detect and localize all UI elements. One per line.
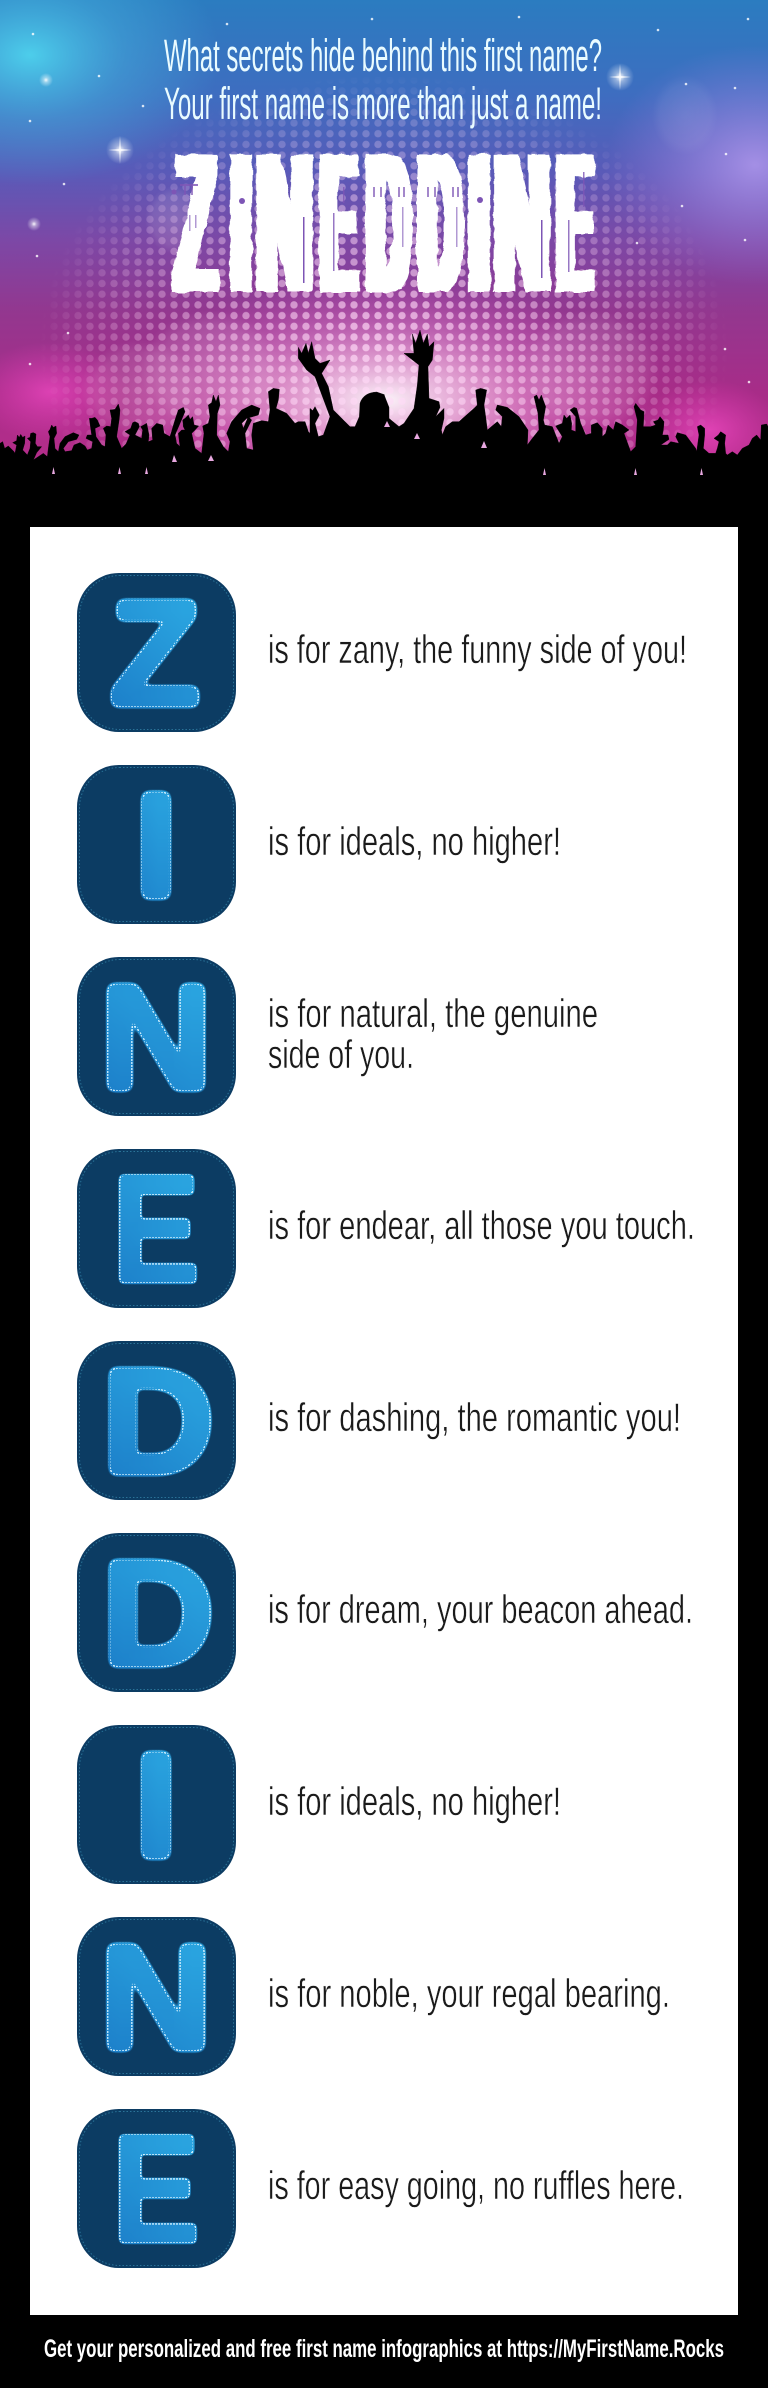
icon: letter E: E <box>112 2104 200 2275</box>
icon: letter I: I <box>133 1722 179 1889</box>
header tagline <box>164 30 602 129</box>
name title: E <box>322 111 355 335</box>
row: D second <box>77 1529 693 1697</box>
icon: letter N: N <box>99 1913 213 2081</box>
text: N line: side of you. <box>268 1033 414 1077</box>
crowd silhouette <box>0 330 768 528</box>
icon: letter I <box>77 1722 236 1889</box>
icon: letter D: D <box>101 1529 215 1697</box>
row: E <box>77 1144 695 1315</box>
name title: Z <box>176 113 216 335</box>
row: Z <box>77 569 687 737</box>
name title: I <box>469 111 489 335</box>
name title: I <box>231 111 251 335</box>
text: N line <box>268 992 598 1077</box>
text: I line: is for ideals, no higher! <box>268 1780 561 1824</box>
name title: E <box>558 111 592 335</box>
icon: letter E: E <box>112 1144 200 1315</box>
text: I line: is for ideals, no higher! <box>268 820 561 864</box>
icon: letter Z <box>77 569 236 737</box>
row: E second <box>77 2104 684 2275</box>
row: N <box>77 953 598 1121</box>
icon: letter E <box>77 1144 236 1315</box>
icon: letter N: N <box>99 953 213 1121</box>
hero background <box>0 0 768 460</box>
row: N second <box>77 1913 670 2081</box>
row: I <box>77 762 561 929</box>
name title <box>172 111 592 336</box>
icon: letter I: I <box>133 762 179 929</box>
icon: letter I <box>77 762 236 929</box>
text: N line: is for natural, the genuine <box>268 992 598 1036</box>
row: D <box>77 1337 681 1505</box>
icon: letter E <box>77 2104 236 2275</box>
name title: D <box>368 113 409 335</box>
row: I second <box>77 1722 561 1889</box>
name title: D <box>419 113 461 335</box>
name title: N <box>257 112 312 336</box>
white content panel <box>30 527 738 2315</box>
name title: N <box>495 112 549 336</box>
sparkles and stars <box>27 16 750 383</box>
icon: letter Z: Z <box>109 569 201 737</box>
icon: letter D: D <box>101 1337 215 1505</box>
